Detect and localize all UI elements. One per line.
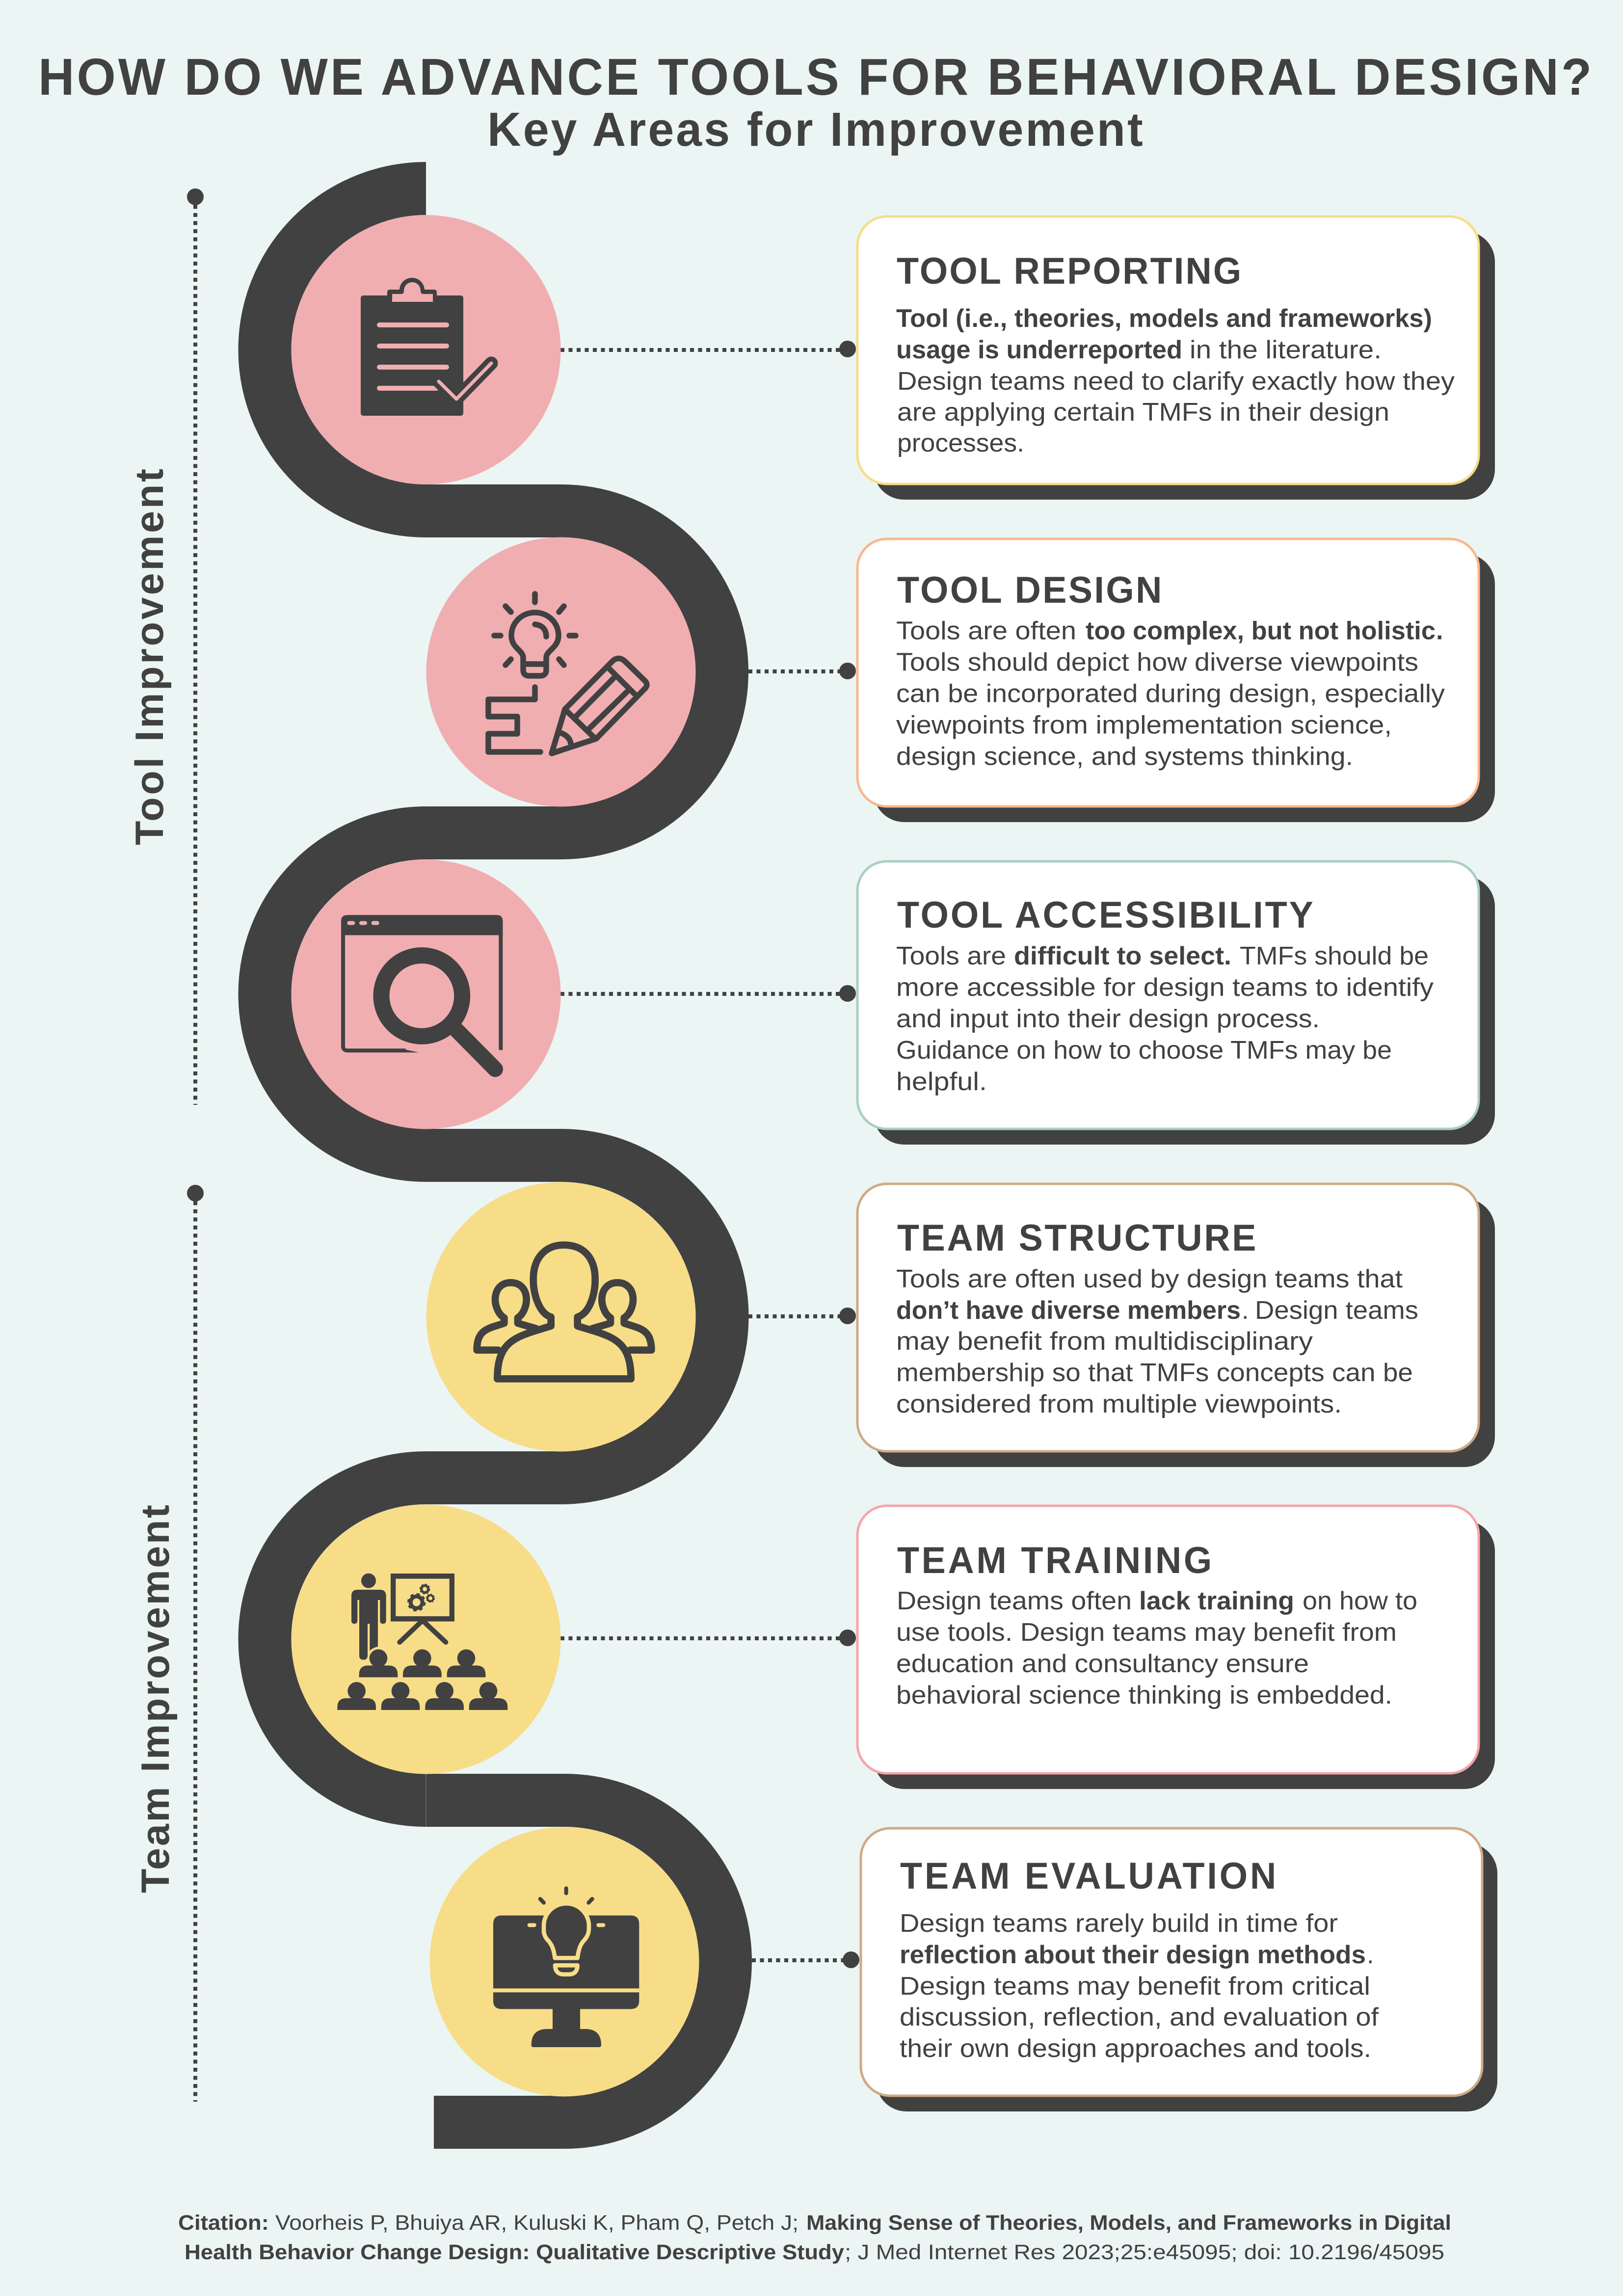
panel: team training xyxy=(857,1506,1495,1789)
panel: tool design xyxy=(857,539,1495,822)
circle: team training xyxy=(292,1505,560,1774)
body text: tool accessibility: and input into their design process. xyxy=(896,1005,1320,1033)
body text: tool reporting: Tool (i.e., theories, models and frameworks) xyxy=(896,304,1432,333)
body text: tool accessibility: more accessible for design teams to identify xyxy=(896,973,1434,1002)
body text: team evaluation: . xyxy=(1367,1941,1374,1969)
citation xyxy=(178,2211,1451,2264)
citation: Citation: xyxy=(178,2211,269,2235)
body text: team training: education and consultancy ensure xyxy=(896,1650,1309,1678)
connector lines xyxy=(560,350,851,1960)
winding path xyxy=(265,188,725,2122)
circle: team evaluation xyxy=(430,1827,699,2097)
body text: team evaluation: Design teams may benefit from critical xyxy=(900,1972,1370,2001)
heading: tool design: TOOL DESIGN xyxy=(897,569,1162,611)
body text: tool accessibility xyxy=(896,942,1434,1096)
main heading: HOW DO WE ADVANCE TOOLS FOR BEHAVIORAL DESIGN? xyxy=(38,48,1592,106)
body text: tool reporting: Design teams need to clarify exactly how they xyxy=(897,367,1455,396)
body text: tool accessibility: Tools are xyxy=(896,942,1006,970)
connector end dots xyxy=(839,341,859,1968)
section label: Team Improvement: Team Improvement xyxy=(133,1505,178,1893)
body text: team structure: . xyxy=(1242,1296,1249,1325)
circle: tool reporting xyxy=(292,215,560,484)
body text: tool design: . xyxy=(1436,616,1443,645)
body text: team structure: membership so that TMFs concepts can be xyxy=(896,1359,1413,1387)
icon: clipboard with check xyxy=(361,278,491,416)
panel: team evaluation xyxy=(861,1828,1497,2111)
body text: tool reporting xyxy=(896,304,1455,457)
heading: team training: TEAM TRAINING xyxy=(897,1539,1212,1581)
body text: team evaluation: reflection about their design methods xyxy=(900,1941,1366,1969)
heading: team evaluation: TEAM EVALUATION xyxy=(900,1855,1276,1896)
body text: team evaluation xyxy=(900,1909,1379,2063)
citation: Voorheis P, Bhuiya AR, Kuluski K, Pham Q, Petch J; xyxy=(275,2211,798,2235)
section label: Team Improvement xyxy=(133,1185,204,2102)
icon: light bulb and pencil xyxy=(488,594,647,753)
body text: team structure: don’t have diverse members xyxy=(896,1296,1241,1325)
body text: tool design: Tools are often xyxy=(896,616,1076,645)
icon: team of three people xyxy=(477,1245,651,1379)
body text: tool design: viewpoints from implementation science, xyxy=(896,711,1392,739)
icon: presenter with audience xyxy=(337,1574,507,1710)
body text: team structure xyxy=(896,1265,1418,1418)
panel: team structure xyxy=(857,1184,1495,1467)
body text: team training: Design teams often xyxy=(897,1587,1132,1615)
icon: monitor with light bulb xyxy=(493,1888,639,2047)
body text: team structure: considered from multiple viewpoints. xyxy=(896,1390,1342,1418)
body text: tool reporting: usage is underreported xyxy=(896,336,1182,364)
body text: tool design xyxy=(896,616,1445,771)
body text: team training: behavioral science thinking is embedded. xyxy=(896,1681,1392,1709)
title block xyxy=(38,48,1592,156)
icon: browser window with magnifier xyxy=(341,915,506,1071)
body text: tool accessibility: Guidance on how to choose TMFs may be xyxy=(896,1036,1392,1065)
heading: tool accessibility: TOOL ACCESSIBILITY xyxy=(897,894,1313,935)
body text: team training: lack training xyxy=(1139,1587,1294,1615)
section label: Tool Improvement xyxy=(128,188,204,1105)
body text: team training xyxy=(896,1587,1417,1709)
body text: team training: use tools. Design teams may benefit from xyxy=(896,1618,1397,1647)
body text: tool design: design science, and systems thinking. xyxy=(896,742,1353,771)
citation: Health Behavior Change Design: Qualitative Descriptive Study xyxy=(185,2241,844,2264)
circle: tool accessibility xyxy=(292,860,560,1129)
heading: tool reporting: TOOL REPORTING xyxy=(897,250,1241,292)
circle: team structure xyxy=(426,1182,696,1452)
circle: tool design xyxy=(426,537,696,807)
body text: team training: on how to xyxy=(1303,1587,1417,1615)
body text: tool reporting: processes. xyxy=(897,429,1024,457)
body text: team structure: Design teams xyxy=(1255,1296,1418,1325)
body text: team evaluation: Design teams rarely build in time for xyxy=(900,1909,1338,1938)
body text: tool design: too complex, but not holistic xyxy=(1086,616,1436,645)
body text: team structure: may benefit from multidisciplinary xyxy=(896,1327,1313,1356)
body text: tool design: Tools should depict how diverse viewpoints xyxy=(896,648,1418,676)
body text: tool accessibility: helpful. xyxy=(896,1068,987,1096)
body text: tool design: can be incorporated during design, especially xyxy=(896,679,1445,708)
panel: tool accessibility xyxy=(857,861,1495,1145)
section label: Tool Improvement: Tool Improvement xyxy=(128,469,172,845)
body text: team evaluation: their own design approaches and tools. xyxy=(900,2034,1371,2063)
panel: tool reporting xyxy=(857,216,1495,500)
citation: Making Sense of Theories, Models, and Frameworks in Digital xyxy=(806,2211,1451,2235)
body text: tool accessibility: difficult to select. xyxy=(1014,942,1231,970)
citation: ; J Med Internet Res 2023;25:e45095; doi: 10.2196/45095 xyxy=(845,2241,1444,2264)
body text: tool reporting: are applying certain TMFs in their design xyxy=(897,398,1389,427)
body text: tool accessibility: TMFs should be xyxy=(1240,942,1429,970)
subtitle: Key Areas for Improvement xyxy=(487,103,1143,156)
heading: team structure: TEAM STRUCTURE xyxy=(897,1217,1256,1258)
body text: team structure: Tools are often used by design teams that xyxy=(896,1265,1403,1293)
body text: team evaluation: discussion, reflection, and evaluation of xyxy=(900,2003,1379,2031)
body text: tool reporting: in the literature. xyxy=(1190,336,1382,364)
